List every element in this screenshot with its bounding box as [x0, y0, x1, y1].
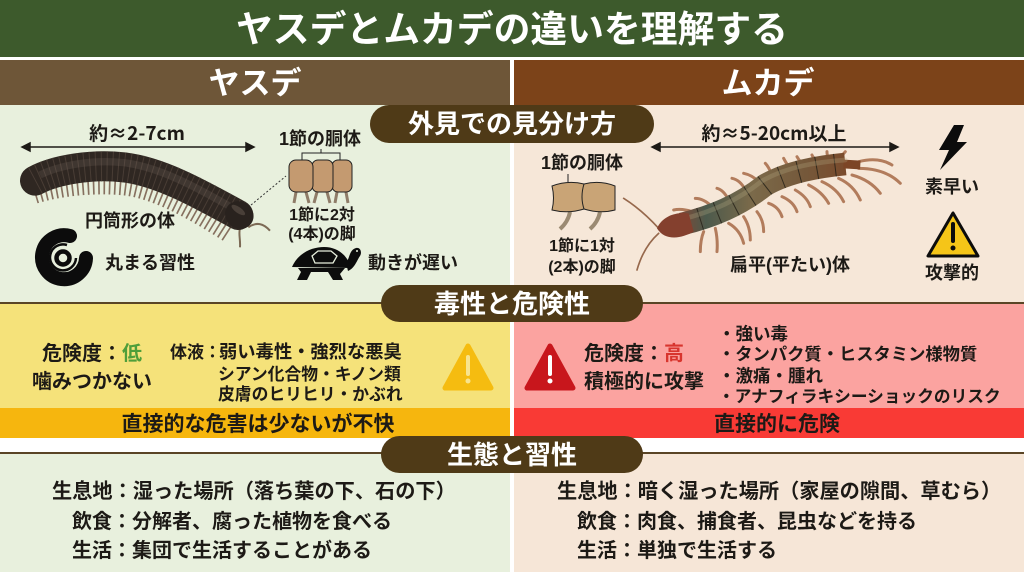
panel: centipede toxicity	[514, 304, 1024, 408]
panel: millipede ecology: 飲食：分解者、腐った植物を食べる	[72, 510, 392, 533]
legs per segment label: (2本)の脚	[548, 258, 616, 276]
size arrow	[652, 143, 898, 151]
icon: amber warning	[445, 346, 491, 388]
centipede illustration	[624, 152, 900, 270]
section pill: toxicity: 毒性と危険性	[434, 289, 590, 319]
active attack: 積極的に攻撃	[584, 370, 704, 393]
icon: turtle	[292, 247, 361, 280]
title banner: ヤスデとムカデの違いを理解する	[236, 9, 788, 50]
legs per segment label: (4本)の脚	[288, 225, 356, 243]
toxicity list: ・アナフィラキシーショックのリスク	[718, 387, 1001, 406]
millipede illustration	[35, 162, 270, 247]
section pill: ecology: 生態と習性	[447, 440, 577, 470]
panel: centipede ecology: 生活：単独で生活する	[577, 539, 777, 562]
section pill: appearance	[370, 105, 654, 143]
icon: lightning bolt	[939, 125, 967, 170]
toxicity list: ・激痛・腫れ	[718, 366, 823, 386]
body fluid details: 皮膚のヒリヒリ・かぶれ	[218, 384, 403, 404]
size label: 約≈5-20cm以上	[702, 119, 846, 146]
column header: centipede	[514, 60, 1024, 105]
segment diagram: two segments	[552, 174, 615, 229]
summary band: millipede	[0, 408, 510, 438]
panel: centipede ecology	[514, 454, 1024, 572]
section pill: toxicity	[381, 285, 643, 322]
summary band: centipede	[514, 408, 1024, 438]
body fluid details: 弱い毒性・強烈な悪臭	[219, 341, 402, 362]
legs per segment label: 1節に1対	[549, 236, 615, 255]
icon: curling up	[42, 235, 86, 279]
summary band: millipede: 直接的な危害は少ないが不快	[122, 412, 394, 436]
segment label: 1節の胴体	[541, 152, 623, 173]
panel: millipede ecology	[0, 454, 510, 572]
body fluid details	[170, 341, 403, 404]
title banner	[0, 0, 1024, 57]
section pill: ecology	[381, 436, 643, 473]
panel: centipede ecology: 生息地：暗く湿った場所（家屋の隙間、草むら）	[557, 479, 1001, 503]
panel: millipede ecology: 生活：集団で生活することがある	[72, 538, 372, 562]
panel: millipede ecology: 生息地：湿った場所（落ち葉の下、石の下）	[52, 479, 456, 503]
no biting: 噛みつかない	[32, 370, 152, 393]
body shape label: 扁平(平たい)体	[730, 255, 850, 275]
panel: millipede toxicity	[0, 304, 510, 408]
toxicity list	[718, 324, 1001, 406]
slow movement label: 動きが遅い	[368, 252, 458, 273]
aggressive label: 攻撃的	[925, 262, 979, 283]
icon: red warning	[527, 346, 573, 388]
legs per segment label	[548, 236, 616, 276]
icon: warning sign	[928, 213, 978, 256]
rule above toxicity	[0, 302, 1024, 304]
section pill: appearance: 外見での見分け方	[408, 109, 616, 139]
body fluid details: シアン化合物・キノン類	[218, 365, 401, 384]
panel: millipede appearance	[0, 105, 510, 302]
segment diagram: three segments	[251, 149, 352, 205]
size label: 約≈2-7cm	[89, 119, 185, 146]
legs per segment label: 1節に2対	[289, 205, 355, 224]
panel: centipede appearance	[514, 105, 1024, 302]
summary band: centipede: 直接的に危険	[714, 413, 840, 436]
toxicity list: ・タンパク質・ヒスタミン様物質	[718, 344, 977, 364]
segment label: 1節の胴体	[279, 128, 361, 149]
rule above ecology	[0, 452, 1024, 454]
body shape label: 円筒形の体	[85, 210, 175, 231]
column header: centipede: ムカデ	[722, 66, 814, 101]
fast label: 素早い	[925, 177, 979, 197]
curling label: 丸まる習性	[105, 253, 195, 273]
toxicity list: ・強い毒	[718, 324, 788, 344]
danger level: 危険度：低	[42, 341, 142, 365]
column header: millipede	[0, 60, 510, 105]
size arrow	[22, 143, 254, 151]
panel: centipede ecology: 飲食：肉食、捕食者、昆虫などを持る	[577, 510, 917, 533]
legs per segment label	[288, 205, 356, 243]
danger level: 危険度：高	[584, 341, 684, 365]
column header: millipede: ヤスデ	[208, 66, 302, 101]
body fluid details: 体液：	[170, 343, 221, 362]
